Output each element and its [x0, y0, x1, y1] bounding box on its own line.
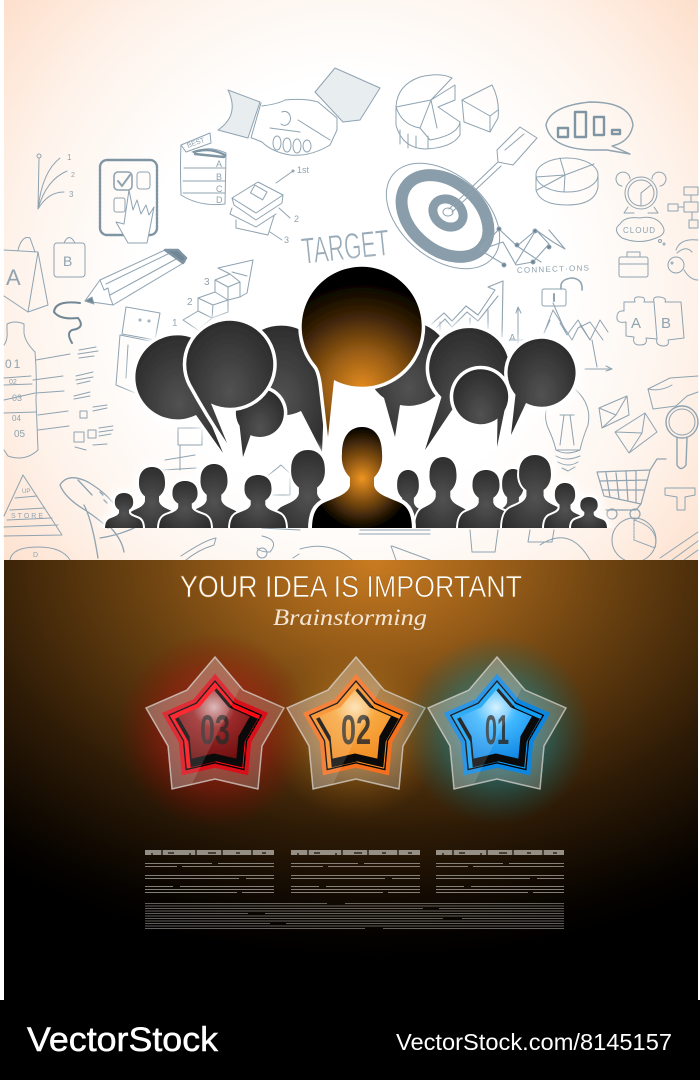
subheading: brainstorming: Brainstorming — [273, 605, 427, 630]
panel: watermark bar — [0, 1000, 700, 1080]
icon: magnifier — [666, 406, 698, 468]
person: back left — [277, 440, 325, 528]
icon: curved arrow — [648, 376, 698, 409]
icon: stacked books — [230, 165, 310, 245]
person: left 2 — [130, 465, 172, 528]
icon: pie chart — [396, 75, 460, 149]
icon: bottle with labels — [4, 322, 113, 458]
icon: best list cylinder: A — [216, 159, 222, 169]
icon: bottle with labels: 02 — [9, 379, 17, 386]
icon: bottle with labels: 04 — [12, 414, 21, 423]
icon: connections network: CONNECT·ONS — [517, 263, 589, 275]
icon: speech bubble with bars — [546, 102, 633, 154]
icon: pyramid: UP — [22, 489, 30, 495]
icon: bottle with labels: 01 — [5, 357, 22, 371]
icon: stacked books: 3 — [284, 235, 289, 245]
panel: hand-drawn doodles — [4, 68, 698, 562]
text block: column 2 placeholder — [291, 850, 420, 892]
person: right 1 — [397, 470, 419, 516]
icon: shopping cart — [597, 459, 666, 519]
bubble: far left — [135, 335, 223, 453]
icon: alarm clock — [616, 172, 666, 213]
icon: stairs arrow: 3 — [204, 277, 210, 288]
icon: puzzle pieces — [617, 297, 684, 346]
text block: wide paragraph placeholder — [145, 904, 564, 928]
text: target: TARGET — [300, 222, 391, 272]
icon: small chart behind people — [163, 428, 202, 470]
bubble: small right — [453, 369, 508, 447]
bubble: small left — [236, 389, 284, 457]
icon: t-shaped block — [665, 488, 695, 510]
bubble: behind centre right — [366, 322, 450, 437]
icon: d disc: D — [33, 552, 38, 559]
person: right 4 — [502, 469, 524, 510]
icon: d disc — [10, 547, 70, 560]
icon: corner pencil — [660, 532, 698, 560]
icon: stairs arrow: 1 — [172, 318, 178, 329]
icon: best list cylinder — [180, 133, 226, 205]
panel: audience silhouettes — [105, 427, 607, 530]
text block: column 3 placeholder — [436, 850, 564, 892]
icon: curve chart: 2 — [71, 172, 75, 179]
icon: shopping bag A — [4, 238, 48, 312]
person: right 6 — [544, 483, 586, 529]
icon: computer mouse — [60, 478, 136, 558]
icon: rising line chart — [427, 281, 503, 337]
text: vectorstock url: VectorStock.com/8145157 — [396, 1029, 672, 1055]
icon: red star 03: 03 — [200, 706, 230, 753]
icon: pencil — [85, 250, 186, 305]
text block: column 1 placeholder — [145, 850, 274, 892]
icon: usb stick — [116, 307, 160, 395]
icon: connections network — [480, 227, 589, 275]
panel: sketch paper background — [4, 0, 698, 560]
person: right 2 — [414, 457, 466, 528]
icon: shopping bag B — [54, 238, 85, 277]
icon: bottle with labels: 05 — [14, 429, 26, 440]
icon: blue star 01 — [406, 641, 585, 818]
icon: red star 03 — [128, 644, 296, 820]
icon: cloud: CLOUD — [623, 226, 655, 235]
panel: dark lower section — [4, 560, 698, 1000]
icon: bullseye target — [366, 127, 537, 290]
icon: pyramid — [4, 475, 62, 536]
icon: pie circle — [612, 518, 656, 562]
icon: stairs arrow — [172, 260, 253, 330]
icon: flowchart — [668, 187, 698, 228]
icon: stacked books: 2 — [294, 214, 299, 224]
person: central orange — [312, 427, 412, 530]
bubble: far right — [508, 339, 576, 435]
icon: best list cylinder: D — [216, 195, 223, 205]
person: left 3 — [159, 481, 211, 529]
icon: small axis chart: A — [509, 333, 516, 344]
person: left 5 — [230, 475, 286, 529]
icon: envelopes — [599, 396, 657, 453]
icon: curve chart: 1 — [67, 153, 72, 162]
person: right 3 — [456, 470, 506, 528]
icon: handshake — [218, 68, 380, 155]
icon: bottle with labels: 03 — [12, 393, 22, 403]
icon: light bulb — [546, 390, 589, 471]
icon: pyramid: STORE — [11, 513, 43, 520]
icon: orange star 02 — [274, 656, 428, 810]
bubble: right — [425, 328, 509, 450]
icon: stairs arrow: 2 — [187, 297, 193, 308]
icon: shopping bag B: B — [63, 253, 72, 269]
bubble: behind centre left — [236, 326, 326, 452]
icon: cottage — [265, 465, 295, 495]
icon: curve chart: 3 — [69, 190, 74, 199]
bubble: central orange — [302, 267, 422, 437]
icon: best list cylinder: B — [216, 172, 222, 182]
icon: blue star 01: 01 — [485, 706, 509, 753]
icon: pie slice — [462, 85, 498, 132]
icon: best list cylinder: C — [216, 184, 223, 194]
icon: pie disc — [536, 158, 598, 205]
icon: briefcase — [619, 252, 648, 277]
text: vectorstock logo: VectorStock — [27, 1021, 219, 1059]
icon: shopping bag A: A — [6, 265, 21, 290]
person: left 4 — [193, 464, 236, 528]
icon: curve chart — [37, 153, 75, 209]
icon: cloud — [616, 217, 665, 245]
icon: piggy — [668, 240, 698, 280]
icon: zigzag area chart — [544, 303, 612, 371]
icon: puzzle pieces: B — [661, 315, 671, 332]
panel: speech bubbles — [135, 267, 576, 457]
bubble: large left — [186, 321, 273, 443]
icon: stacked books: 1st — [297, 165, 310, 175]
person: left 1 — [105, 493, 143, 529]
person: right 5 — [500, 455, 559, 528]
icon: best list cylinder: BEST — [186, 137, 207, 150]
heading: your idea is important: YOUR IDEA IS IMPORTANT — [180, 569, 522, 604]
icon: orange star 02: 02 — [341, 706, 371, 753]
icon: open padlock — [542, 278, 582, 306]
icon: small axis chart — [509, 307, 530, 345]
icon: tablet with hand — [100, 160, 157, 243]
icon: squiggle line — [54, 302, 81, 343]
icon: bottom doodles — [181, 528, 590, 560]
person: right 7 — [571, 497, 607, 529]
icon: puzzle pieces: A — [631, 315, 641, 332]
